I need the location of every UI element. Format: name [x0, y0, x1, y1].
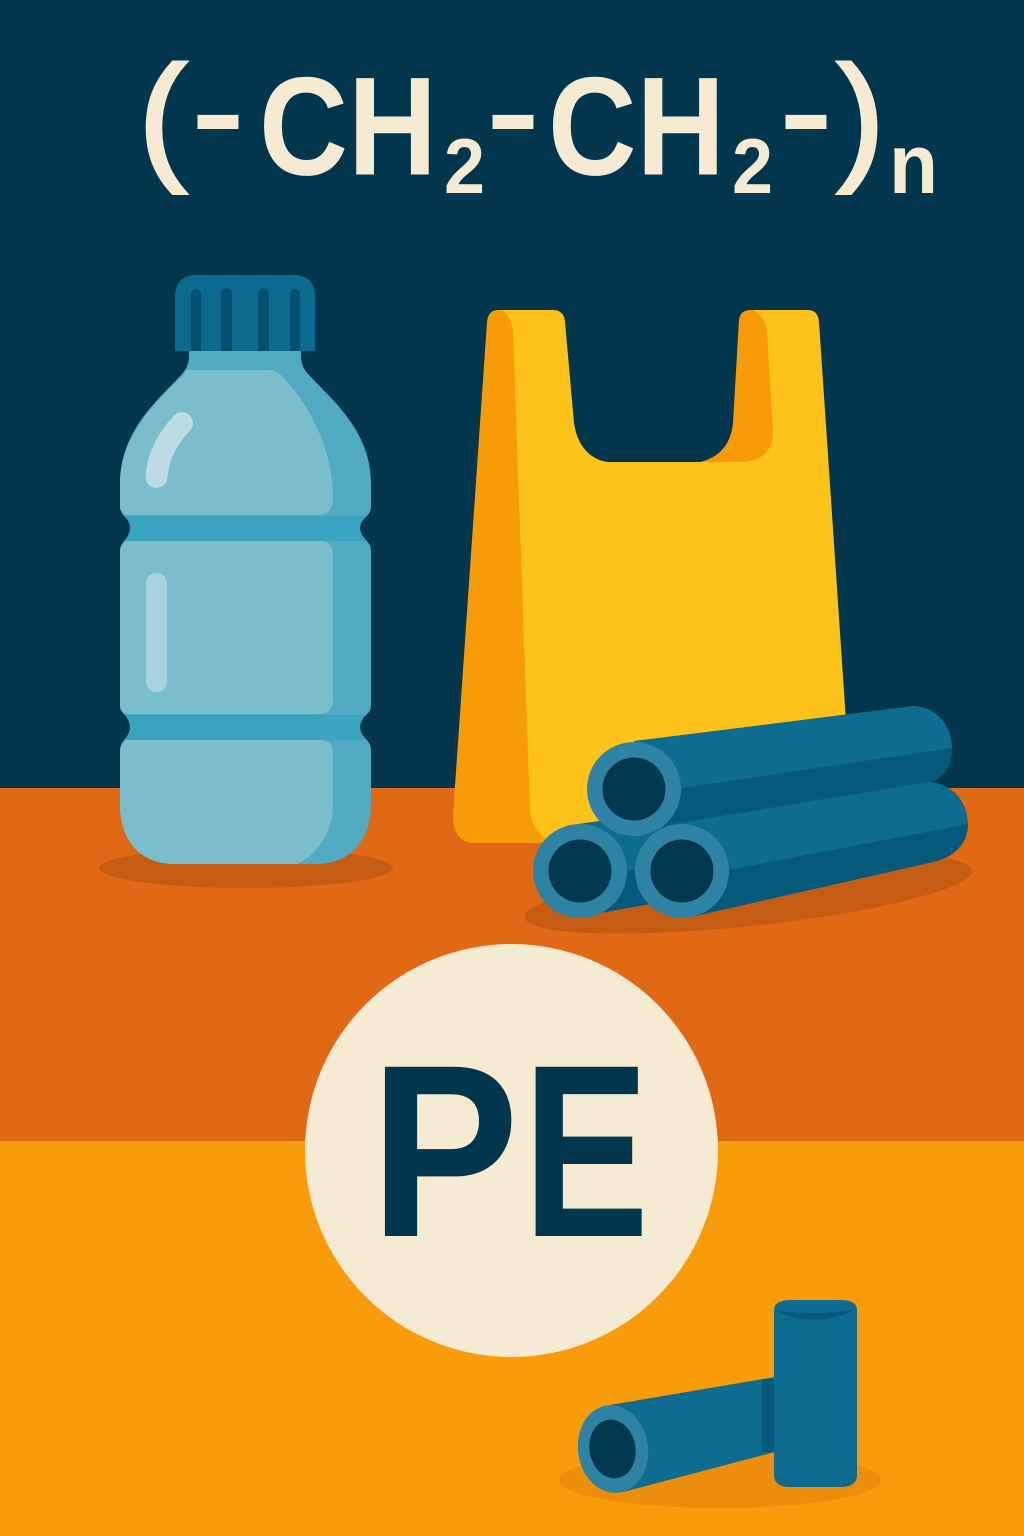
icon: stack of blue pipes	[521, 706, 976, 949]
title: polyethylene chemical formula: CH	[259, 48, 437, 204]
bottle ribs	[125, 516, 366, 541]
bag front	[502, 310, 850, 843]
bottle body	[120, 351, 371, 864]
title: polyethylene chemical formula: CH	[548, 48, 725, 204]
icon: plastic carrier bag	[453, 310, 850, 843]
bottom right pipe	[635, 782, 968, 918]
title: polyethylene chemical formula: n	[889, 117, 938, 211]
standing pipe	[774, 1300, 857, 1487]
bottom left pipe	[533, 818, 690, 918]
badge label: P	[370, 1014, 519, 1289]
icon: water bottle	[99, 275, 393, 888]
bottle cap	[175, 275, 315, 351]
background: amber lower band	[0, 1141, 1024, 1536]
bag right handle fold	[700, 310, 785, 462]
title: polyethylene chemical formula	[139, 32, 938, 211]
title: polyethylene chemical formula: 2	[444, 122, 485, 210]
background: orange middle band	[0, 788, 1024, 1141]
badge label: E	[523, 1014, 649, 1289]
badge: PE circle	[305, 944, 718, 1357]
title: polyethylene chemical formula: –	[195, 32, 241, 191]
title: polyethylene chemical formula: –	[783, 32, 829, 191]
title: polyethylene chemical formula: (	[139, 37, 186, 194]
background: navy upper band	[0, 0, 1024, 790]
title: polyethylene chemical formula: –	[490, 32, 536, 191]
bottle shadow	[99, 848, 393, 888]
bottle front highlight panels	[120, 370, 333, 515]
lying pipe	[572, 1377, 776, 1497]
bag left fold	[453, 310, 570, 843]
badge label	[370, 1014, 649, 1289]
top pipe	[587, 706, 952, 836]
pipe stack shadow	[521, 839, 976, 949]
bottle shine marks	[156, 423, 182, 477]
title: polyethylene chemical formula: 2	[732, 122, 773, 210]
icon: small pipe pieces	[559, 1300, 881, 1508]
title: polyethylene chemical formula: )	[838, 37, 884, 194]
pieces shadow	[559, 1452, 881, 1508]
